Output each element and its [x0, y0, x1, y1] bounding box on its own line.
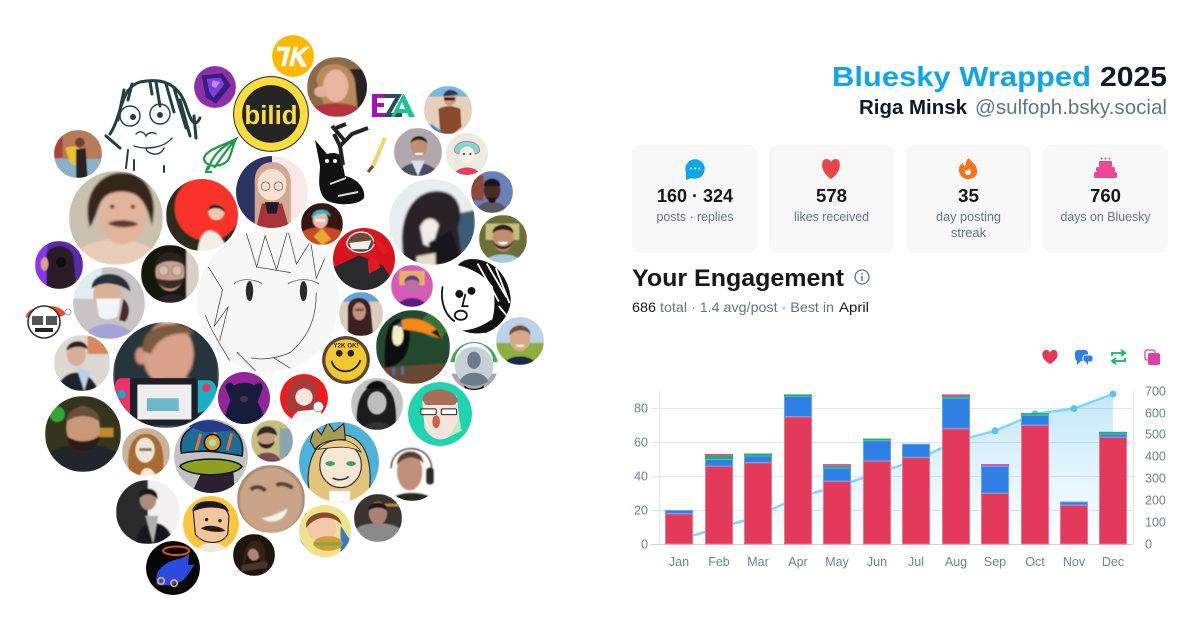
- icon: onion logo: [204, 139, 236, 172]
- avatar: smiley Y2K: [322, 336, 370, 384]
- engagement summary: April: [839, 299, 869, 315]
- avatar: curly hair man with moustache: [69, 171, 163, 265]
- avatar: default profile with ring: [450, 338, 498, 390]
- avatar: santa mask: [26, 306, 71, 338]
- avatar: black and white sketch: [435, 259, 511, 335]
- title: Bluesky Wrapped: [832, 61, 1091, 92]
- icon: info: [855, 270, 869, 284]
- right axis labels: 600: [1145, 406, 1166, 420]
- avatar: gray shirt man: [354, 494, 402, 542]
- avatar: bear purple: [218, 372, 270, 424]
- right axis labels: 200: [1145, 494, 1166, 508]
- title: [832, 61, 1167, 92]
- icon: chat bubble: [685, 159, 705, 180]
- illustration: sketch girl with glasses: [106, 81, 200, 172]
- left axis labels: 40: [634, 470, 648, 484]
- avatar: cartoon moustache man: [183, 496, 239, 552]
- panel: likes received: likes received: [794, 210, 869, 224]
- title: 2025: [1100, 61, 1167, 92]
- panel: posting streak: [906, 145, 1031, 253]
- avatar: dark suit man: [116, 480, 180, 544]
- panel: posting streak: 35: [958, 186, 979, 206]
- month labels: Dec: [1102, 555, 1124, 569]
- user name and handle: @sulfoph.bsky.social: [975, 97, 1167, 119]
- avatar: grayscale woman with hat: [351, 378, 403, 430]
- avatar: big sketch face: [205, 232, 325, 371]
- month labels: Jul: [908, 555, 924, 569]
- avatar: close-up smiling face: [237, 465, 305, 533]
- icon: cake: [1094, 158, 1117, 178]
- panel: posts and replies: posts · replies: [656, 210, 734, 224]
- avatar: blue bird on black: [146, 541, 200, 595]
- avatar: suit with lanyard: [394, 128, 442, 176]
- panel: days on Bluesky: 760: [1090, 186, 1121, 206]
- avatar: smiley Y2K: Y2K OK!: [333, 343, 359, 350]
- avatar: hugging photo: [54, 130, 102, 178]
- avatar: glasses man: [141, 245, 199, 303]
- left axis labels: 0: [641, 538, 648, 552]
- icon: quotes squares: [1145, 350, 1160, 365]
- chart legend: [1042, 350, 1160, 365]
- icon: replies bubbles: [1075, 350, 1093, 365]
- panel: posting streak: day posting: [936, 210, 1001, 224]
- stacked bars: [666, 394, 1127, 544]
- grid lines: [651, 391, 1134, 544]
- avatar cloud: [26, 35, 544, 595]
- avatar: yellow K logo: [272, 35, 314, 77]
- right axis labels: 300: [1145, 472, 1166, 486]
- right axis labels: 700: [1145, 384, 1166, 398]
- month labels: May: [825, 555, 850, 569]
- avatar: woman with dark hair covering face: [389, 179, 475, 265]
- right axis labels: 0: [1145, 538, 1152, 552]
- month labels: Apr: [788, 555, 808, 569]
- panel: likes received: 578: [816, 186, 847, 206]
- avatar: bilid logo: bilid: [244, 102, 298, 130]
- panel: days on Bluesky: days on Bluesky: [1060, 210, 1151, 224]
- cumulative area: [679, 394, 1113, 544]
- avatar: red parasol: [166, 175, 241, 251]
- avatar: man beard green light: [45, 396, 121, 472]
- avatar: blonde woman: [307, 57, 368, 117]
- right axis labels: [1145, 384, 1166, 552]
- month labels: Jun: [867, 555, 887, 569]
- icon: reposts arrows: [1112, 350, 1125, 364]
- avatar: anime girl brown hair: [236, 156, 308, 228]
- right axis labels: 400: [1145, 450, 1166, 464]
- icon: flame: [959, 158, 977, 179]
- month labels: Sep: [984, 555, 1006, 569]
- avatar: woman in mask: [73, 267, 145, 339]
- panel: posting streak: streak: [951, 226, 987, 240]
- panel: likes received: [769, 145, 894, 253]
- engagement summary: 686: [632, 299, 656, 315]
- avatar: red-haired anime: [280, 374, 328, 422]
- avatar: persona character: [333, 228, 395, 290]
- left axis labels: 80: [634, 402, 648, 416]
- user name and handle: Riga Minsk: [859, 97, 968, 119]
- avatar: frog with turban: [174, 419, 248, 493]
- panel: posts and replies: 160 · 324: [657, 186, 733, 206]
- avatar: dark girl: [233, 534, 275, 576]
- avatar: teal hair glasses: [301, 203, 343, 245]
- left axis labels: 60: [634, 436, 648, 450]
- avatar: sepia drawing: [122, 428, 170, 476]
- avatar: teal cartoon man: [408, 382, 472, 446]
- heading: Your Engagement: Your Engagement: [632, 265, 844, 292]
- avatar: burger girl: [299, 505, 351, 557]
- month labels: Feb: [708, 555, 730, 569]
- icon: heart: [822, 159, 840, 179]
- month labels: Jan: [669, 555, 689, 569]
- illustration: black cat with cigarette: [315, 124, 385, 204]
- month labels: Oct: [1025, 555, 1045, 569]
- avatar: purple gem: [194, 66, 236, 108]
- icon: likes heart: [1042, 350, 1058, 364]
- user name and handle: [859, 97, 1167, 119]
- left axis labels: [634, 402, 648, 552]
- avatar: man in hood: [471, 171, 513, 213]
- engagement summary: total · 1.4 avg/post · Best in: [660, 299, 834, 315]
- avatar: man in suit: [54, 335, 110, 391]
- right axis labels: 500: [1145, 428, 1166, 442]
- panel: days on Bluesky: [1043, 145, 1168, 253]
- month labels: Aug: [945, 555, 967, 569]
- avatar: bearded man with glasses small: [251, 420, 293, 462]
- panel: posts and replies: [632, 145, 757, 253]
- avatar: beach: [424, 86, 472, 134]
- avatar: man in field: [496, 317, 544, 365]
- cumulative line: [679, 390, 1116, 540]
- avatar: toucan: [376, 310, 450, 384]
- month labels: Mar: [747, 555, 769, 569]
- avatar: smiling man: [479, 215, 527, 263]
- right axis labels: 100: [1145, 516, 1166, 530]
- avatar: man with headphones: [383, 443, 441, 501]
- avatar: purple headphones: [35, 241, 83, 289]
- left axis labels: 20: [634, 504, 648, 518]
- chart: monthly engagement: [634, 384, 1166, 569]
- avatar: man holding Nintendo Switch: [113, 322, 219, 428]
- avatar: teal hair drawing: [446, 133, 488, 175]
- avatar: bilid logo: [233, 76, 309, 152]
- month labels: [669, 555, 1124, 569]
- logo: EZA: [372, 94, 415, 117]
- avatar: purple woman: [391, 265, 433, 307]
- avatar: blonde anime with crown: [299, 422, 379, 502]
- month labels: Nov: [1063, 555, 1086, 569]
- avatar: woman dark hair: [339, 292, 383, 336]
